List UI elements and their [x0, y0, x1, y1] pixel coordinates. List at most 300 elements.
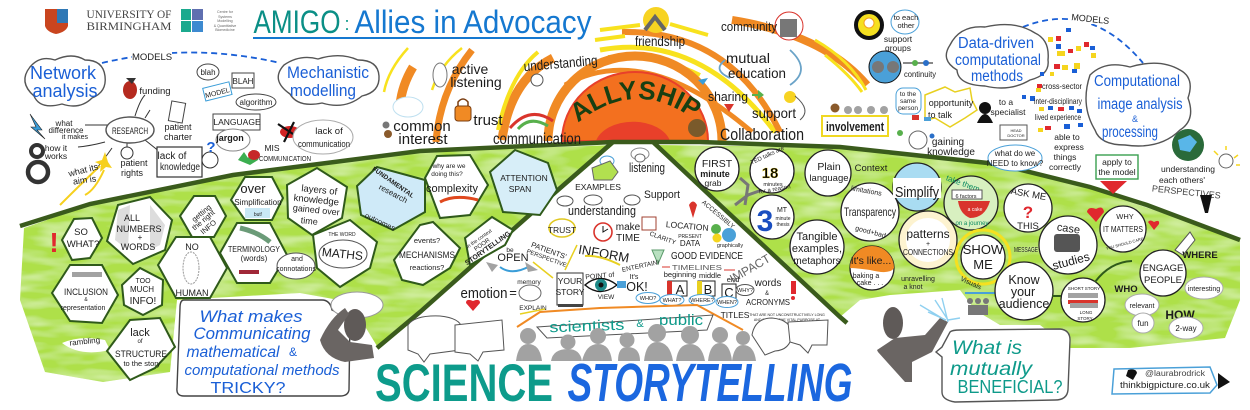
circle: Take them on a journey: take them — [945, 173, 981, 194]
rambling — [62, 335, 110, 352]
BLAH: BLAH — [233, 77, 254, 86]
who what where when why: WHERE? — [690, 298, 714, 304]
logo: University of Birmingham — [45, 9, 172, 34]
fun: fun — [1137, 319, 1149, 328]
A B C — [664, 270, 739, 300]
hex: layers of knowledge: layers of — [301, 183, 338, 198]
hex: POOR STORYTELLING: POOR — [473, 237, 492, 253]
timelines — [662, 265, 735, 272]
circle: Transparency: good+bad — [854, 225, 887, 240]
circle: It's like — [850, 246, 894, 290]
circle: Engage people: ENGAGE — [1143, 263, 1183, 274]
research cloud: RESEARCH — [112, 126, 148, 136]
icon: two faces — [869, 51, 901, 83]
hex: getting the right info: getting — [190, 202, 213, 224]
cloud: Computational image analysis and processing: processing — [1102, 124, 1158, 141]
circle: FIRST minute grab: grab — [704, 178, 722, 188]
hex: over simplification: over — [240, 181, 266, 196]
question bubble: tricky: mathematical — [186, 344, 280, 361]
mis-communication label — [259, 143, 311, 163]
A B C: middle — [699, 271, 721, 280]
idea bulb — [1214, 146, 1240, 168]
active listening: active — [452, 61, 488, 77]
cloud: lack of communication: lack of — [315, 126, 343, 137]
timelines: TIMELINES — [672, 265, 722, 272]
to each other — [891, 10, 919, 34]
circle: It's like: It's like... — [851, 255, 891, 267]
lack of knowledge: knowledge — [160, 162, 200, 173]
circle: 3 MT — [750, 195, 794, 239]
circle: short story long story: SHORT STORY — [1068, 286, 1100, 291]
hex: MECHANISMS: MECHANISMS — [399, 250, 455, 260]
emotion equals: emotion — [460, 285, 508, 302]
hex: FUNDAMENTAL research: research — [377, 183, 409, 205]
hex: over simplification: but! — [254, 212, 262, 218]
where: WHERE — [1182, 250, 1218, 261]
patients perspective: PERSPECTIVE — [526, 249, 567, 269]
circle: 3 MT: MT — [777, 207, 788, 214]
question bubble: tricky: What makes — [200, 307, 303, 326]
able to express things correctly — [1049, 132, 1084, 172]
hex: MATHS: MATHS — [321, 245, 364, 263]
red arrow down — [1100, 181, 1127, 194]
cloud: Data-driven computational methods: Data-driven — [958, 35, 1034, 52]
to the same person: person — [898, 105, 918, 112]
words and acronyms — [746, 278, 796, 307]
jargon speech bubbles — [197, 64, 276, 151]
hearts — [1087, 208, 1159, 230]
question bubble: tricky — [177, 300, 350, 397]
logo: SMQB: Systems — [218, 15, 232, 19]
circle: Engage people: PEOPLE — [1144, 275, 1182, 286]
circle: Know your audience: your — [1011, 285, 1035, 299]
circle: FIRST minute grab: minute — [700, 169, 730, 179]
ground lines — [20, 142, 1240, 348]
miscommunication — [238, 120, 353, 165]
cloud: Data-driven computational methods — [946, 25, 1048, 88]
hex: MATHS: THE WORD — [328, 232, 356, 238]
circle: It's like: cake . . . — [857, 280, 883, 287]
arc: inner orange band — [565, 70, 752, 132]
hex: MECHANISMS: reactions? — [410, 263, 444, 272]
skills list: lived experience — [1035, 112, 1081, 122]
2-way: 2-way — [1175, 324, 1197, 333]
who what where when why: WHO? — [640, 296, 656, 302]
arc: outer community band — [732, 20, 867, 85]
hex: NO HUMAN: HUMAN — [176, 288, 208, 298]
hex: lack of STRUCTURE — [107, 318, 175, 380]
titles: TITLES — [721, 310, 750, 320]
circle: TED talks 18 minutes: minutes — [763, 182, 783, 188]
titles: THAT ARE NOT UNCONSTRUCTIVELY LONG — [749, 313, 825, 317]
credit tag — [1112, 367, 1230, 394]
circle: TED talks 18 minutes: for a reason — [759, 184, 791, 196]
title: : — [344, 14, 350, 34]
circle: TED talks 18 minutes — [750, 145, 794, 196]
icon: twitter bird — [1126, 369, 1137, 380]
head doctor card — [1000, 125, 1027, 140]
circle: Know your audience: Know — [1008, 273, 1041, 287]
circle: short story long story: STORY — [1077, 316, 1093, 321]
who: WHO — [1114, 284, 1138, 295]
circle: Know your audience — [995, 262, 1053, 320]
hex: layers of knowledge: time — [300, 215, 318, 227]
arc: friendship band — [622, 32, 780, 132]
involvement — [822, 104, 888, 136]
what difference it makes — [48, 119, 89, 141]
person at line — [1200, 195, 1212, 213]
circle: short story long story: LONG — [1080, 310, 1093, 315]
rambling: rambling — [69, 335, 100, 348]
hex: FUNDAMENTAL research — [357, 166, 425, 233]
circle: 3 MT: 3 — [757, 205, 773, 238]
hexagons left — [49, 150, 557, 380]
sharing: sharing — [708, 89, 748, 104]
cloud: Computational image analysis and processing — [1086, 63, 1191, 146]
cloud: Network analysis: Network — [30, 63, 97, 83]
common interest: interest — [398, 131, 448, 148]
hex: over simplification — [231, 177, 283, 220]
icon: heart — [466, 300, 480, 311]
green field: right — [653, 145, 1240, 348]
circle: Plain language: language — [809, 173, 849, 184]
circle: Case studies: studies — [1051, 249, 1091, 273]
to a specialist — [991, 97, 1026, 117]
memory brain — [517, 279, 541, 301]
hex: ATTENTION SPAN: ATTENTION — [500, 173, 548, 183]
skills list: inter-disciplinary — [1034, 96, 1083, 106]
graphically venn — [711, 224, 743, 249]
where — [1175, 232, 1218, 261]
mis-communication label: COMMUNICATION — [259, 156, 311, 163]
circle: Take them on a journey — [944, 173, 998, 230]
question bubble: tricky: & — [289, 345, 297, 359]
A B C: C — [724, 285, 734, 300]
understanding: understanding — [568, 203, 636, 218]
connector to engage — [1052, 261, 1132, 296]
models link left: MODELS — [132, 52, 172, 63]
collaboration: Collaboration — [720, 126, 804, 144]
emotion equals: = — [509, 285, 517, 300]
to the same person — [896, 88, 921, 114]
presenter figure — [877, 298, 960, 382]
cloud: Data-driven computational methods: computational — [955, 52, 1041, 69]
LANGUAGE: LANGUAGE — [213, 117, 261, 127]
support groups — [856, 10, 1044, 171]
interesting: interesting — [1188, 286, 1220, 293]
support groups label — [884, 34, 913, 53]
triangle centre content — [460, 148, 825, 322]
apply to the model: apply to — [1102, 157, 1132, 167]
continuity — [903, 60, 937, 79]
circle: FIRST minute grab: FIRST — [702, 158, 733, 170]
what difference it makes: difference — [48, 126, 84, 135]
thinking figure — [320, 292, 383, 362]
understanding: understanding — [523, 52, 598, 74]
able to express things correctly: things — [1054, 152, 1076, 162]
hex: FUNDAMENTAL research: FUNDAMENTAL — [371, 166, 415, 200]
skills list: cross-sector — [1042, 81, 1082, 91]
circle: Transparency: Transparency — [844, 205, 896, 219]
communication — [493, 114, 581, 148]
hex: layers of knowledge: gained over — [292, 203, 340, 217]
mutual education: mutual — [726, 50, 770, 66]
location — [665, 202, 709, 233]
patients perspective: PATIENTS' — [530, 240, 568, 261]
2-way — [1169, 317, 1203, 339]
speech bubbles bottom right — [752, 318, 828, 355]
message: MESSAGE — [1014, 245, 1038, 254]
circle: ASK ME THIS: THIS — [1017, 221, 1039, 232]
circle: TED talks 18 minutes: TED talks are — [750, 145, 786, 166]
community: community — [721, 19, 777, 34]
logo: University of Birmingham: UNIVERSITY OF — [86, 9, 172, 21]
present data: DATA — [680, 239, 701, 248]
common interest — [382, 97, 451, 148]
circle: ASK ME THIS — [1004, 184, 1052, 232]
who what where when why: WHEN? — [717, 300, 737, 306]
question bubble: tricky: computational methods — [184, 362, 340, 379]
circle: Take them on a journey: on a journey — [955, 221, 989, 227]
website: thinkbigpicture.co.uk — [1120, 380, 1210, 391]
hex: ATTENTION SPAN: SPAN — [509, 184, 531, 194]
skills list — [1034, 81, 1083, 122]
location: LOCATION — [665, 219, 709, 233]
hex: MECHANISMS — [394, 222, 460, 285]
banner: scientists and public: scientists — [549, 317, 625, 336]
research cloud — [106, 117, 154, 143]
hex: SO WHAT: WHAT? — [67, 239, 99, 250]
opportunity to talk: opportunity — [929, 98, 974, 108]
cloud: Network analysis: analysis — [32, 81, 98, 101]
circle: Tangible examples metaphors: metaphors — [793, 256, 841, 267]
question bubble: tricky: Communicating — [194, 324, 311, 343]
entertain: ENTERTAIN! — [621, 259, 660, 274]
to the same person: same — [900, 98, 916, 105]
A B C: A — [676, 282, 685, 297]
hex: complexity: why are we — [432, 163, 466, 170]
circle: Plain language: Plain — [817, 161, 841, 173]
what its aim is — [60, 152, 112, 205]
hex: MECHANISMS: events? — [414, 236, 440, 245]
title — [253, 4, 592, 40]
head doctor card: HEAD — [1010, 128, 1022, 133]
apply to the model: the model — [1098, 167, 1136, 177]
gaining knowledge: gaining — [932, 137, 964, 148]
explain: EXPLAIN — [519, 305, 547, 312]
who what where when why: WHY? — [737, 288, 753, 294]
clock and make time — [594, 217, 656, 244]
cloud: Mechanistic modelling — [278, 56, 379, 105]
A B C: beginning — [664, 270, 696, 279]
be open: OPEN — [497, 252, 529, 264]
your story book — [556, 273, 585, 307]
circle: SHOW ME: SHOW — [963, 242, 1004, 257]
hex: layers of knowledge: knowledge — [293, 193, 339, 208]
what do we need to know: what do we — [994, 149, 1036, 158]
hex: lack of STRUCTURE: lack — [130, 327, 150, 339]
blah: blah — [200, 68, 216, 77]
question bubble: mutually beneficial: mutually — [950, 359, 1034, 380]
able to express things correctly: express — [1054, 142, 1084, 152]
circle: Transparency — [841, 183, 899, 241]
titles: AND EXPLAIN THE VITAL PURPOSE AT — [754, 318, 821, 322]
circle: Why it matters — [1100, 206, 1146, 252]
patients perspective — [526, 240, 577, 278]
clock and make time: make — [616, 222, 641, 233]
be open — [486, 247, 538, 272]
hex: getting the right info — [180, 196, 226, 237]
cloud: Computational image analysis and processing: Computational — [1094, 73, 1180, 90]
it's ok: It's — [630, 274, 639, 281]
what difference it makes: what — [55, 119, 73, 128]
gaining knowledge: knowledge — [927, 147, 975, 158]
circle: ASK ME THIS: ? — [1023, 203, 1033, 222]
circle: Patterns connections: CONNECTIONS — [903, 248, 953, 257]
logo: SMQB — [181, 9, 236, 32]
hex: getting the right info: INFO — [199, 218, 218, 236]
hex: SO WHAT — [62, 218, 102, 260]
cloud: Mechanistic modelling: Mechanistic — [287, 64, 369, 82]
your story book: YOUR — [558, 276, 582, 286]
visuals: Visuals — [959, 276, 983, 292]
present data: PRESENT — [678, 234, 702, 240]
present data — [678, 234, 702, 248]
hex: layers of knowledge — [287, 168, 347, 235]
confused person: ? — [206, 139, 216, 156]
circle: short story long story — [1061, 278, 1105, 322]
algorithm: algorithm — [240, 98, 273, 107]
inform: INFORM — [577, 242, 630, 265]
head doctor card: DOCTOR — [1007, 133, 1025, 138]
circle: Tangible examples metaphors: Tangible — [797, 231, 837, 243]
hex: INCLUSION: representation — [61, 305, 105, 312]
hex: complexity: doing this? — [431, 171, 463, 178]
support groups label: support — [884, 34, 913, 44]
understanding — [523, 52, 598, 86]
banner: scientists and public — [517, 305, 743, 338]
cloud: and connotations — [276, 253, 316, 279]
continuity: continuity — [904, 69, 937, 79]
relevant: relevant — [1130, 303, 1155, 310]
logo: University of Birmingham: BIRMINGHAM — [86, 21, 172, 33]
audience icon — [965, 292, 1005, 315]
what its aim is: what its — [66, 161, 100, 179]
hex: TOO MUCH INFO: MUCH — [130, 285, 154, 294]
sun and rainbow arcs — [384, 20, 867, 142]
icon: chomping mouth — [238, 150, 260, 165]
cloud: lack of communication: communication — [298, 139, 350, 149]
patient charter — [164, 101, 192, 142]
circle: Take them on a journey: a cake — [968, 207, 983, 213]
what difference it makes: it makes — [62, 134, 89, 141]
hex: NO HUMAN — [158, 237, 227, 298]
collaboration — [688, 119, 804, 144]
hex: TERMINOLOGY — [220, 223, 287, 283]
circle: Tangible examples metaphors: examples, — [792, 243, 842, 255]
to a specialist: to a — [999, 97, 1013, 107]
audience — [516, 324, 756, 361]
active listening — [433, 61, 502, 90]
how it works: how it — [45, 143, 68, 153]
who what where when why: WHAT? — [663, 298, 681, 304]
hex: POOR STORYTELLING: STORYTELLING — [464, 230, 513, 267]
clouds top — [600, 148, 649, 166]
impact: IMPACT — [727, 251, 773, 286]
words and acronyms: words — [754, 278, 781, 289]
arc: inner rings — [548, 56, 722, 141]
sharing — [698, 78, 764, 112]
hex: ALL NUMBERS + WORDS: NUMBERS — [116, 224, 162, 234]
circle: Plain language — [805, 150, 851, 196]
patient rights — [120, 147, 148, 178]
MODEL: MODEL — [205, 87, 231, 100]
cloud: and connotations: connotations — [276, 266, 316, 273]
hex: over simplification: Simplification — [234, 198, 282, 207]
hex: lack of STRUCTURE: of — [137, 339, 143, 345]
how it works — [44, 143, 68, 161]
circle: It's like: baking a — [853, 273, 879, 280]
gaining knowledge — [927, 137, 975, 158]
circle: Why it matters: IT MATTERS — [1103, 224, 1143, 234]
big heading: SCIENCE STORYTELLING — [375, 353, 852, 410]
mutual education: education — [728, 65, 786, 81]
circle: Case studies — [1039, 216, 1097, 274]
lack of knowledge: lack of — [158, 151, 187, 162]
head with ideas — [897, 115, 934, 149]
to each other: other — [897, 21, 915, 30]
A B C: B — [704, 282, 712, 297]
hex: ALL NUMBERS + WORDS: ALL — [124, 213, 140, 223]
examples — [575, 161, 621, 192]
cloud: Data-driven computational methods: methods — [971, 68, 1023, 85]
circle: Patterns connections: + — [926, 241, 930, 248]
hex: TOO MUCH INFO: TOO — [135, 278, 151, 285]
hex: ALL NUMBERS + WORDS — [107, 197, 172, 264]
circle: TED talks 18 minutes: 18 — [762, 165, 778, 182]
eye point of view — [585, 272, 626, 301]
icon: support circle — [856, 12, 882, 38]
sun core — [596, 122, 670, 141]
who what where when why — [636, 284, 754, 308]
support: support — [752, 105, 796, 121]
how: HOW — [1165, 308, 1195, 322]
cloud: lack of communication — [293, 120, 353, 154]
apply to the model — [1096, 155, 1138, 179]
community — [721, 12, 803, 40]
clock and make time: TIME — [616, 233, 640, 244]
eye point of view: POINT of — [585, 272, 615, 281]
hex: INCLUSION — [52, 265, 118, 323]
confused person — [202, 139, 218, 168]
handle: @laurabrodrick — [1145, 369, 1206, 378]
title: Allies in Advocacy — [354, 4, 592, 40]
hex: ALL NUMBERS + WORDS: WORDS — [121, 242, 155, 252]
cloud: Computational image analysis and processing: & — [1132, 114, 1138, 124]
eye point of view: VIEW — [598, 294, 615, 301]
be open: be — [506, 247, 514, 254]
hex: getting the right info: the right — [190, 207, 217, 232]
patient rights: patient — [120, 158, 148, 168]
logo: SMQB: & Quantitative — [214, 24, 236, 28]
what do we need to know: NEED to know? — [987, 159, 1044, 168]
cloud: Network analysis — [25, 56, 105, 106]
specialist figure — [977, 102, 993, 123]
memory brain: memory — [517, 279, 541, 286]
clarity diamond: CLARITY — [648, 231, 677, 247]
hex: TERMINOLOGY: TERMINOLOGY — [228, 245, 281, 254]
hex: SO WHAT: SO — [74, 227, 88, 238]
